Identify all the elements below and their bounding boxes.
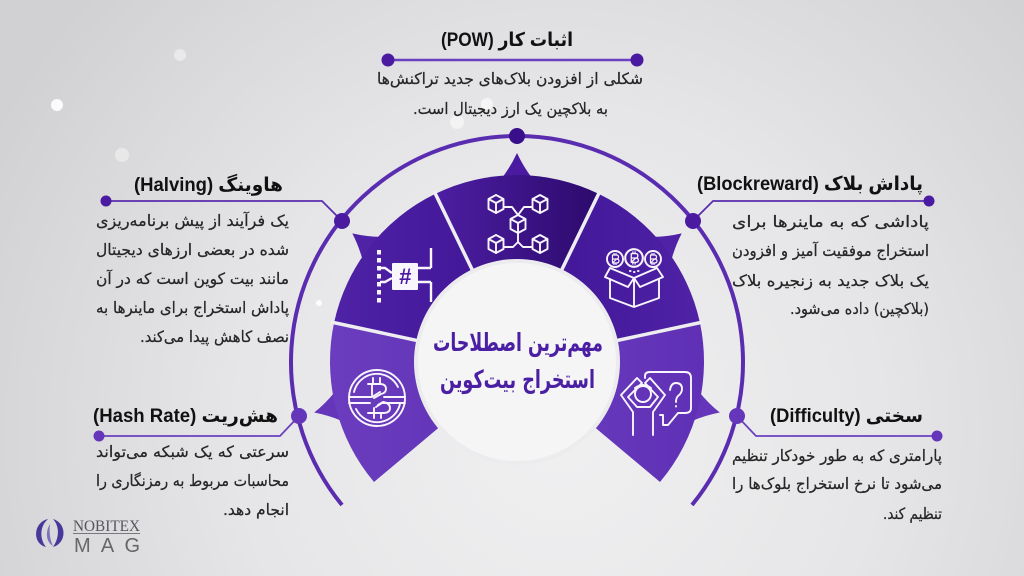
Difficulty description	[732, 447, 942, 523]
icon: blockchain network	[488, 195, 548, 253]
Halving leader line	[100, 196, 350, 229]
Hash Rate description: سرعتی که یک شبکه می‌تواند	[96, 443, 289, 461]
Blockreward description	[732, 213, 929, 318]
icon: hash chip: #	[399, 264, 412, 289]
icon: box with bitcoins	[605, 249, 663, 307]
POW description	[377, 70, 643, 118]
POW heading: اثبات کار (POW)	[441, 30, 573, 51]
Difficulty heading: سختی (Difficulty)	[770, 406, 923, 427]
segment arrows	[311, 153, 723, 427]
POW description: شکلی از افزودن بلاک‌های جدید تراکنش‌ها	[377, 70, 643, 89]
outer arc	[291, 136, 743, 505]
Halving description: نصف کاهش پیدا می‌کند.	[140, 328, 289, 347]
Difficulty description: می‌شود تا نرخ استخراج بلوک‌ها را	[732, 475, 942, 494]
Blockreward block	[685, 174, 934, 318]
segment: top	[435, 175, 599, 362]
center title	[433, 328, 603, 395]
Blockreward description: (بلاکچین) داده می‌شود.	[790, 300, 929, 318]
Halving block	[96, 173, 350, 347]
logo text: NOBITEX	[73, 518, 140, 535]
Blockreward leader line	[685, 196, 934, 229]
Halving description	[96, 211, 289, 347]
icon: hash chip	[379, 248, 431, 303]
POW block	[377, 30, 644, 144]
logo mark	[36, 519, 48, 547]
POW leader line	[382, 54, 644, 66]
icon: person with question bubble	[621, 372, 691, 435]
segment: upper left	[334, 194, 517, 362]
segment: lower left	[330, 323, 517, 482]
Hash Rate block	[93, 406, 307, 519]
wheel of five segments	[311, 153, 723, 482]
POW description: به بلاکچین یک ارز دیجیتال است.	[413, 100, 608, 118]
Halving description: شده در بعضی ارزهای دیجیتال	[96, 241, 289, 259]
segment: lower right	[517, 323, 704, 482]
segment separators	[331, 191, 703, 362]
Halving heading: هاوینگ (Halving)	[134, 173, 283, 196]
Hash Rate description	[96, 443, 289, 519]
decorative light dots	[51, 49, 493, 306]
Difficulty description: پارامتری که به طور خودکار تنظیم	[732, 447, 942, 466]
logo: Nobitex Mag	[36, 518, 140, 557]
Blockreward heading: پاداش بلاک (Blockreward)	[697, 174, 923, 195]
Halving description: یک فرآیند از پیش برنامه‌ریزی	[96, 211, 289, 231]
icon: hash rate bitcoin wheel	[349, 370, 405, 426]
logo: Nobitex Mag: MAG	[74, 535, 140, 557]
Difficulty leader line	[729, 408, 942, 442]
Hash Rate description: انجام دهد.	[223, 501, 289, 519]
POW node	[509, 128, 525, 144]
center circle	[414, 259, 620, 465]
Hash Rate leader line	[94, 408, 307, 442]
Blockreward description: استخراج موفقیت آمیز و افزودن	[732, 241, 929, 261]
Difficulty block	[729, 406, 942, 523]
Blockreward description: یک بلاک جدید به زنجیره بلاک	[732, 272, 929, 290]
center title: استخراج بیت‌کوین	[440, 365, 595, 395]
center title: مهم‌ترین اصطلاحات	[433, 328, 603, 358]
Blockreward description: پاداشی که به ماینرها برای	[732, 213, 929, 232]
Hash Rate description: محاسبات مربوط به رمزنگاری را	[96, 472, 289, 490]
Halving description: مانند بیت کوین است که در آن	[96, 269, 289, 288]
segment: upper right	[517, 194, 700, 362]
Difficulty description: تنظیم کند.	[883, 505, 942, 523]
Hash Rate heading: هش‌ریت (Hash Rate)	[93, 406, 278, 427]
Halving description: پاداش استخراج برای ماینرها به	[96, 299, 289, 318]
